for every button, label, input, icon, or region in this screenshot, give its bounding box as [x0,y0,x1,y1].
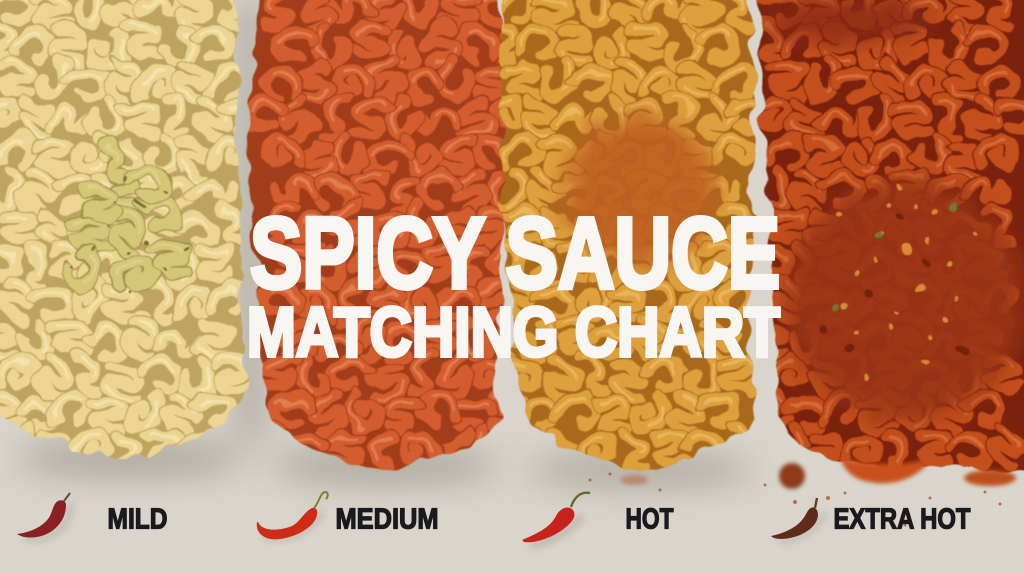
chili flakes [837,187,978,378]
panel: medium red-orange noodles [246,0,506,472]
label: extra hot: EXTRA HOT [834,504,971,536]
label: medium: MEDIUM [336,504,438,536]
icon: extra hot chili [771,498,824,541]
icon: medium chili [257,492,328,539]
extra hot sauce splatter [588,458,1016,526]
panel: mild plain noodles [0,0,260,480]
noodle shadows [15,0,755,484]
title line 1: SPICY SAUCE [250,198,780,310]
chili powder patch [565,115,715,265]
icon: mild chili [17,493,70,539]
panel: extra hot sauce noodles [749,0,1024,490]
panel: hot orange noodles [497,0,759,472]
icon: hot chili [522,493,590,546]
label: hot: HOT [626,504,674,536]
title line 2: MATCHING CHART [247,293,780,371]
herb seasoned centre [69,138,187,292]
label: mild: MILD [108,504,168,536]
title [247,198,780,371]
